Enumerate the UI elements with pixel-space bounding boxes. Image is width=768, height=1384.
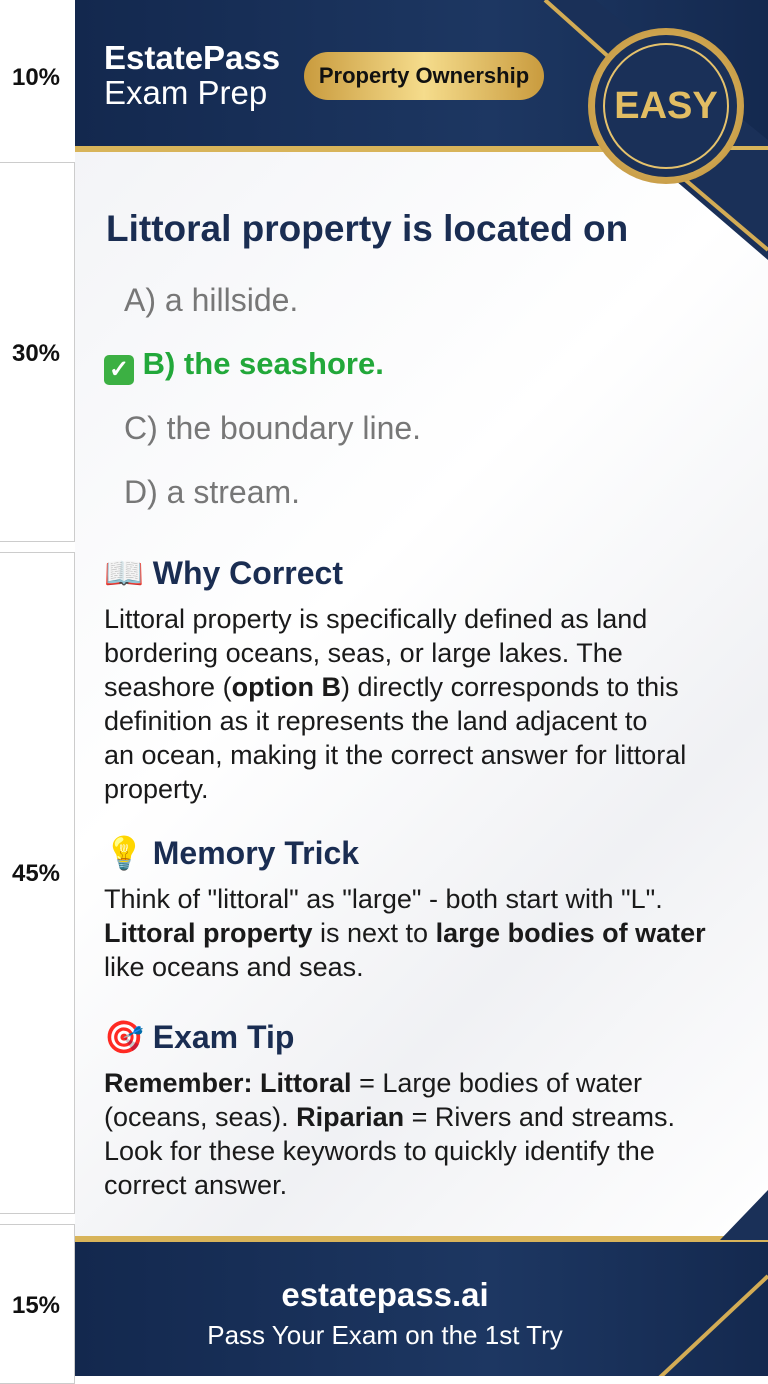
footer corner decoration (720, 1190, 768, 1240)
text: bordering oceans, seas, or large lakes. The (104, 638, 623, 668)
header band (75, 0, 768, 152)
main background (75, 150, 768, 1240)
left column boxes (0, 162, 75, 542)
text: property. (104, 774, 209, 804)
section: why correct: 📖 Why Correct (104, 555, 343, 591)
right diagonal decoration (678, 150, 768, 260)
text: an ocean, making it the correct answer for littoral (104, 740, 686, 770)
text: Littoral property is next to large bodies of water (104, 918, 706, 948)
brand (104, 39, 280, 111)
text: 30% (12, 340, 60, 367)
text: D) a stream. (124, 474, 300, 510)
category pill (304, 52, 544, 100)
brand: EstatePass (104, 39, 280, 76)
footer tagline: Pass Your Exam on the 1st Try (207, 1320, 563, 1350)
percentage labels: 10% (12, 64, 60, 91)
footer site: estatepass.ai (281, 1276, 489, 1313)
section: memory trick: 💡 Memory Trick (104, 835, 359, 871)
brand: Exam Prep (104, 74, 267, 111)
text: definition as it represents the land adjacent to (104, 706, 647, 736)
footer band (75, 1236, 768, 1376)
text: seashore (option B) directly corresponds to this (104, 672, 679, 702)
text: C) the boundary line. (124, 410, 421, 446)
text: ✓ (109, 356, 129, 383)
difficulty badge: EASY (614, 85, 718, 127)
text: like oceans and seas. (104, 952, 364, 982)
text: 45% (12, 860, 60, 887)
text: 15% (12, 1292, 60, 1319)
difficulty badge (588, 28, 744, 184)
text: Littoral property is specifically defined as land (104, 604, 647, 634)
question: Littoral property is located on (106, 208, 628, 249)
text: Think of "littoral" as "large" - both start with "L". (104, 884, 663, 914)
text: B) the seashore. (143, 346, 384, 381)
options: A) a hillside. (124, 282, 298, 318)
text: Remember: Littoral = Large bodies of water (oceans, seas). Riparian = Rivers and streams. Look for these keywords to quickly identify the correct answer. (104, 1068, 675, 1200)
category pill: Property Ownership (319, 63, 529, 88)
section: exam tip: 🎯 Exam Tip (104, 1019, 294, 1055)
